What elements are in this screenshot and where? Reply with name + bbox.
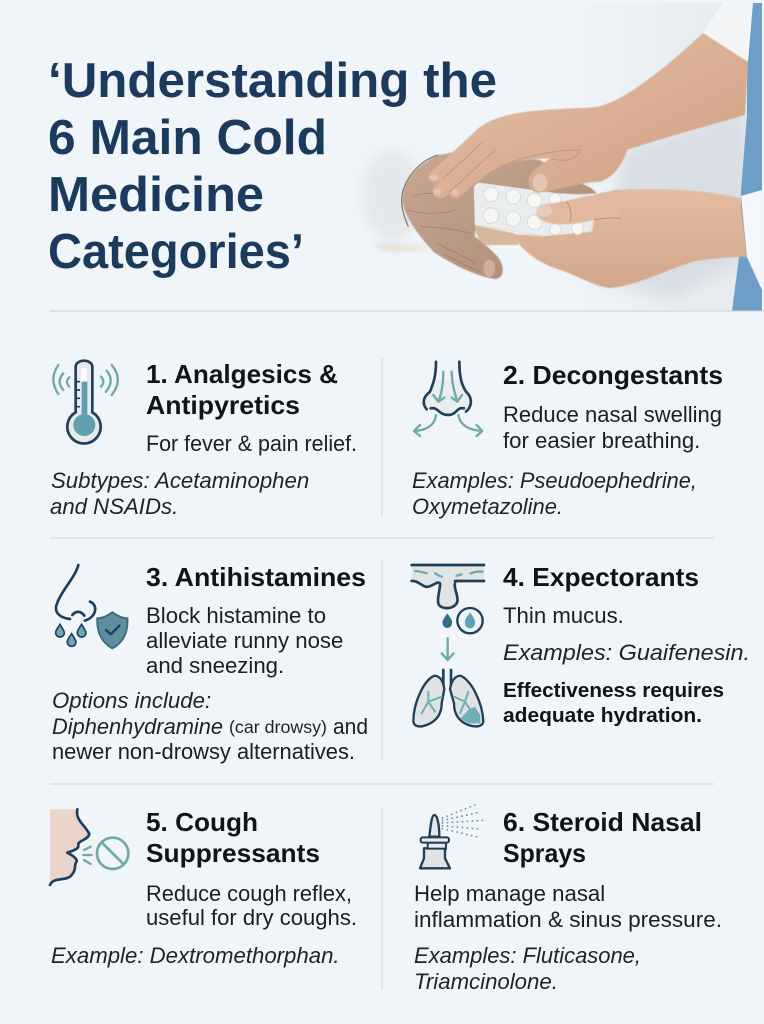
description: and sneezing. — [146, 653, 284, 678]
heading: 6. Steroid Nasal — [503, 807, 702, 837]
options: Options include: — [52, 688, 211, 713]
title: Categories’ — [48, 225, 304, 279]
description — [146, 881, 357, 930]
heading — [146, 807, 320, 868]
description: Reduce cough reflex, — [146, 881, 352, 906]
heading: Suppressants — [146, 838, 320, 868]
subtypes: Subtypes: Acetaminophen — [51, 468, 309, 493]
examples: Examples: Fluticasone, — [414, 943, 641, 968]
title: ‘Understanding the — [48, 54, 497, 108]
heading: 1. Analgesics & — [146, 359, 338, 389]
title: Medicine — [48, 168, 264, 222]
examples — [412, 468, 697, 519]
examples: Examples: Pseudoephedrine, — [412, 468, 697, 493]
subtypes — [50, 468, 309, 519]
icon: nose with drops and shield — [56, 565, 127, 648]
examples — [414, 943, 641, 994]
description: alleviate runny nose — [146, 628, 343, 653]
options: and — [333, 714, 368, 739]
heading: 2. Decongestants — [503, 360, 723, 390]
icon: face with cough and prohibition sign — [50, 809, 128, 885]
description: useful for dry coughs. — [146, 905, 357, 930]
upper hand and forearm — [429, 33, 748, 198]
description: inflammation & sinus pressure. — [414, 907, 722, 932]
icon: thermometer — [53, 361, 118, 443]
heading — [146, 359, 338, 420]
description — [414, 881, 722, 932]
heading: 5. Cough — [146, 807, 258, 837]
hero photo: caregiver hands passing a blister pack — [362, 3, 762, 311]
icon: nose with airflow arrows — [414, 362, 482, 436]
heading: Sprays — [503, 838, 586, 868]
description — [503, 402, 722, 453]
description: Reduce nasal swelling — [503, 402, 722, 427]
hydration note — [503, 679, 724, 727]
description: Block histamine to — [146, 603, 326, 628]
description: For fever & pain relief. — [146, 431, 357, 456]
options: Diphenhydramine — [52, 714, 223, 739]
heading: 4. Expectorants — [503, 562, 699, 592]
description: Thin mucus. — [503, 603, 624, 628]
elderly hand — [403, 150, 597, 279]
description: Help manage nasal — [414, 881, 605, 906]
blister pack — [474, 183, 593, 236]
example: Example: Dextromethorphan. — [51, 943, 340, 968]
title: 6 Main Cold — [48, 111, 327, 165]
description: for easier breathing. — [503, 428, 700, 453]
examples: Examples: Guaifenesin. — [503, 640, 750, 665]
tan table streak — [474, 225, 518, 245]
title — [48, 54, 497, 279]
panel: steroid nasal sprays — [414, 804, 722, 994]
hydration note: adequate hydration. — [503, 704, 702, 727]
examples: Triamcinolone. — [414, 969, 558, 994]
panel: cough suppressants — [50, 807, 357, 968]
description — [146, 603, 343, 678]
lower index finger — [537, 190, 620, 224]
heading: Antipyretics — [146, 390, 300, 420]
panel: analgesics and antipyretics — [50, 359, 357, 519]
lower hand palm — [512, 189, 747, 288]
options: (car drowsy) — [229, 717, 327, 737]
options: newer non-drowsy alternatives. — [52, 739, 355, 764]
icon: nasal spray bottle — [420, 804, 483, 868]
heading — [503, 807, 702, 868]
panel: antihistamines — [52, 562, 368, 764]
panel: decongestants — [412, 360, 723, 519]
subtypes: and NSAIDs. — [50, 494, 178, 519]
heading: 3. Antihistamines — [146, 562, 366, 592]
hydration note: Effectiveness requires — [503, 679, 724, 702]
examples: Oxymetazoline. — [412, 494, 563, 519]
icon: mucus drop, arrow and lungs — [412, 565, 484, 726]
options — [52, 688, 368, 764]
panel: expectorants — [412, 562, 750, 727]
